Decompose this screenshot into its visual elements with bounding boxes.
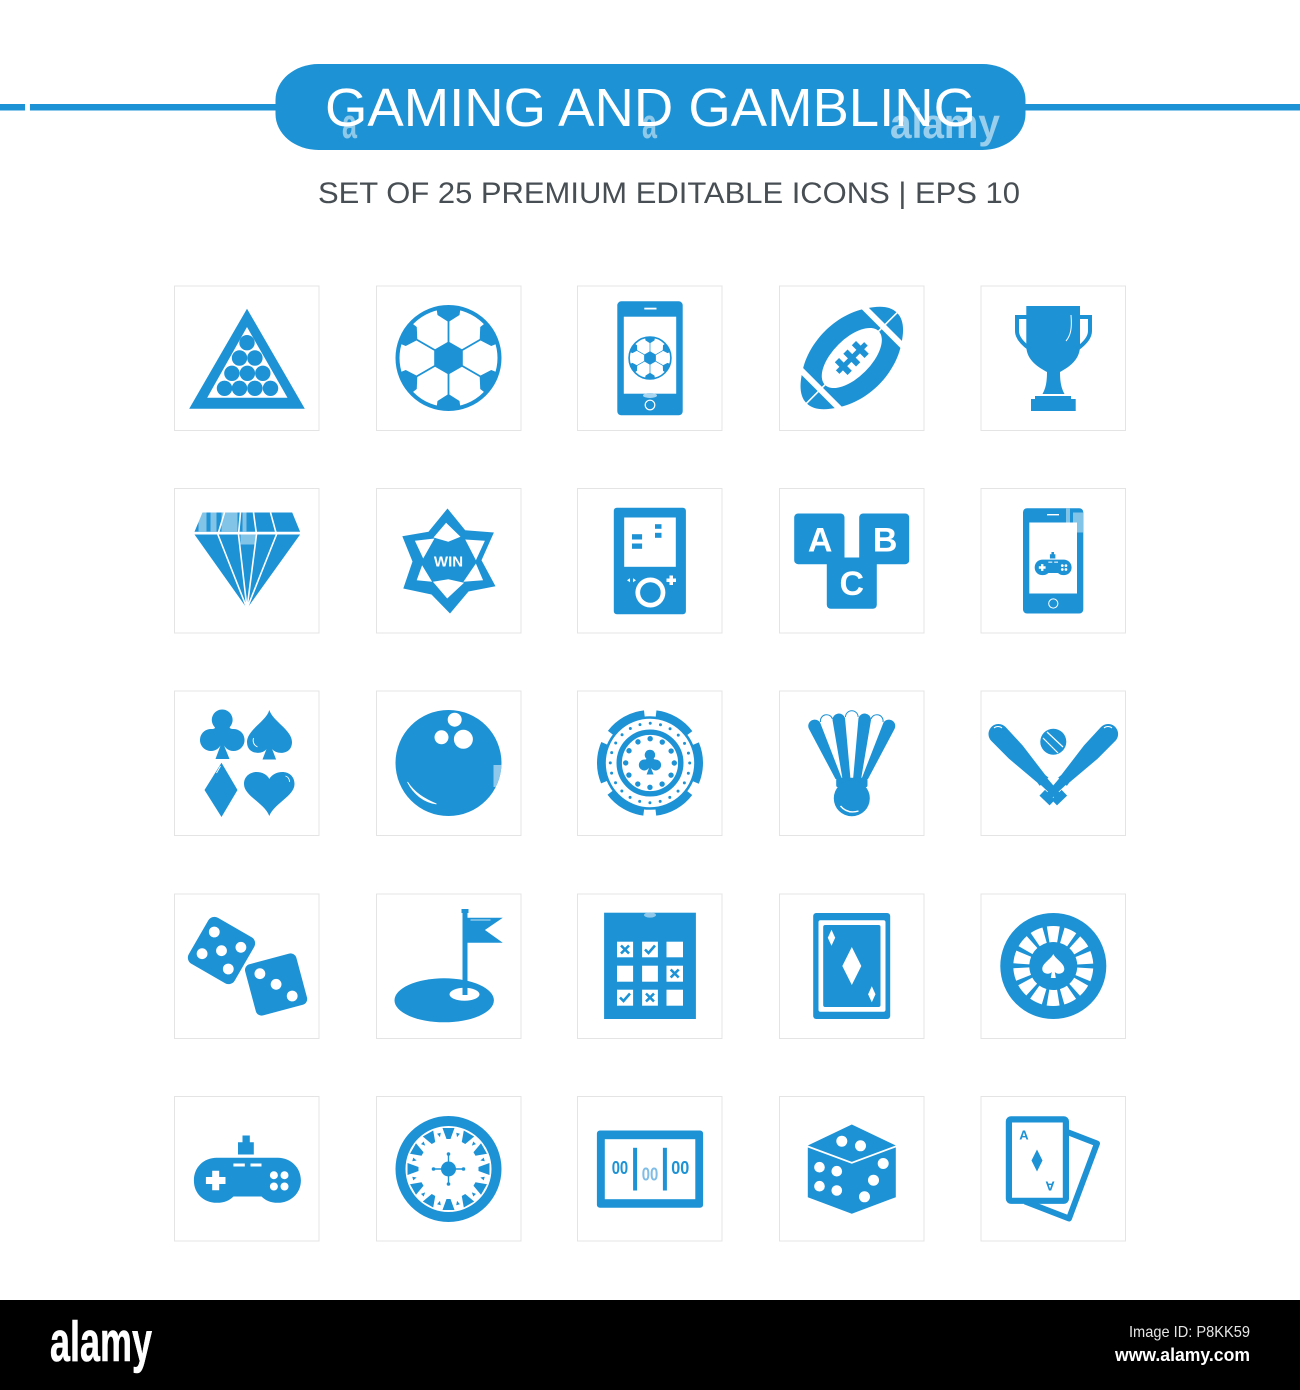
icon: win star (376, 488, 521, 633)
title pill: a (642, 100, 657, 147)
icon: scoreboard: 00 (612, 1158, 628, 1178)
icon: abc blocks (780, 488, 924, 633)
icon: abc blocks: B (873, 522, 897, 560)
icon: card suits (174, 691, 319, 836)
image id: Image ID: P8KK59 (1129, 1324, 1250, 1341)
footer logo: alamy (50, 1310, 152, 1374)
title pill (276, 64, 1026, 150)
icon: roulette spade wheel (981, 894, 1126, 1038)
icon: ace cards: A (1045, 1178, 1055, 1194)
icon: scoreboard (578, 1096, 722, 1241)
title pill: a (342, 100, 357, 147)
icon: shuttlecock (780, 691, 924, 836)
icon: handheld game console (578, 488, 722, 633)
icon: abc blocks: A (808, 522, 832, 560)
icon: diamond (174, 488, 319, 633)
icon: ace cards: A (1019, 1128, 1029, 1142)
line watermark: alamy (3, 95, 104, 142)
icon: trophy (981, 286, 1126, 430)
title pill: alamy (890, 100, 1001, 147)
icon: phone with soccer ball (578, 286, 722, 430)
icon: abc blocks: C (840, 565, 864, 603)
title pill: GAMING AND GAMBLING (325, 78, 976, 138)
icon: lottery ticket (578, 894, 722, 1038)
icon: ace cards (981, 1096, 1126, 1241)
icon: roulette wheel (376, 1096, 521, 1241)
icon: billiard balls rack (174, 286, 319, 430)
icon: soccer ball (376, 286, 521, 430)
icon: bowling ball (376, 691, 521, 836)
icon: crossed bats and ball (981, 691, 1126, 836)
footer bar (0, 1300, 1300, 1390)
icon: game controller (174, 1096, 319, 1241)
icon: golf flag (376, 894, 521, 1038)
icon: scoreboard: 00 (642, 1164, 658, 1184)
icon: scoreboard: 00 (671, 1158, 689, 1178)
icon: phone with gamepad (981, 488, 1126, 633)
icon: american football (778, 284, 925, 432)
icon: playing card (780, 894, 924, 1038)
icon: win star: WIN (434, 554, 463, 570)
subtitle: SET OF 25 PREMIUM EDITABLE ICONS | EPS 10 (318, 177, 1020, 210)
icon: casino chip (578, 691, 722, 836)
icon: single die (780, 1096, 924, 1241)
header divider line (0, 104, 1300, 110)
website: www.alamy.com (1114, 1345, 1250, 1365)
icon: two dice (174, 894, 319, 1038)
